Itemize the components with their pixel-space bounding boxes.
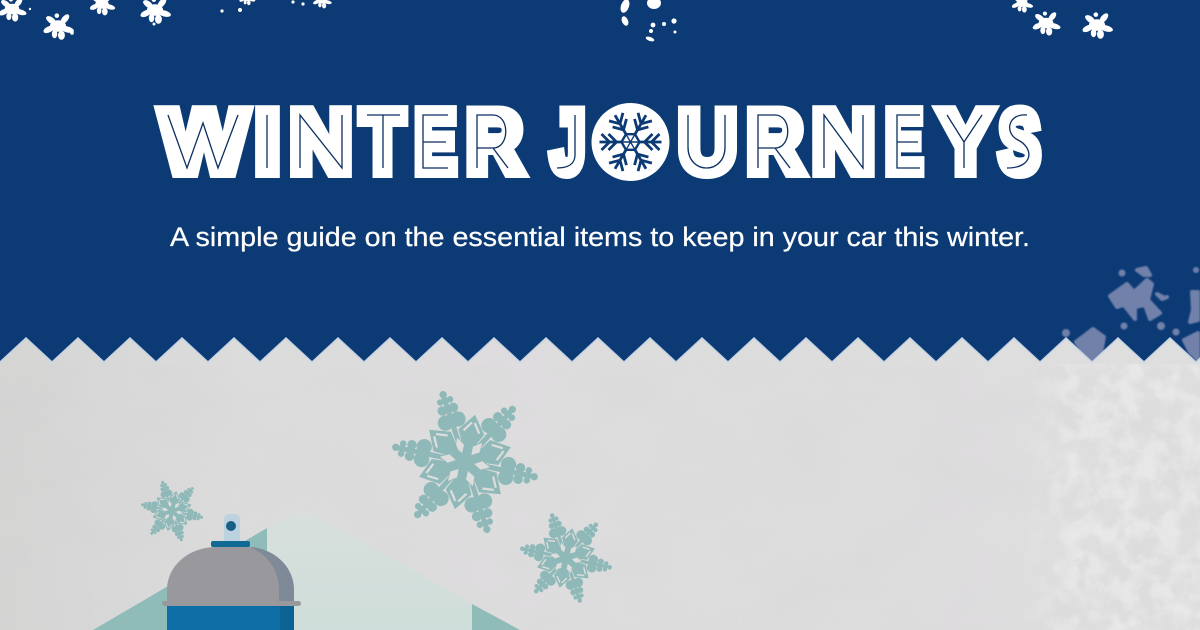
icon: navy snowflake in O <box>588 100 673 184</box>
can nozzle <box>224 514 240 544</box>
can rim <box>162 601 301 606</box>
title: WINTER JOURNEYS: N <box>290 94 352 191</box>
top snow splatters <box>0 0 1114 42</box>
mountain behind spray can <box>93 511 520 630</box>
title: WINTER JOURNEYS: R <box>467 92 522 191</box>
title: WINTER JOURNEYS: J <box>551 93 585 192</box>
title: WINTER JOURNEYS: Y <box>939 92 992 191</box>
title O: snowflake wheel <box>588 100 673 184</box>
title: WINTER JOURNEYS: I <box>255 92 280 191</box>
title: WINTER JOURNEYS: R <box>747 92 803 191</box>
can collar <box>211 541 250 547</box>
snowflake: large centre <box>364 366 566 558</box>
grey snow panel with zigzag edge <box>0 338 1200 630</box>
navy header background <box>0 0 1200 370</box>
title: WINTER JOURNEYS: S <box>999 93 1040 192</box>
title: WINTER JOURNEYS: N <box>812 93 875 191</box>
title: WINTER JOURNEYS: E <box>885 92 923 191</box>
can body shade <box>280 606 294 630</box>
can nozzle dot <box>226 521 236 531</box>
title: WINTER JOURNEYS <box>161 92 1040 192</box>
icon: spray can <box>162 514 301 630</box>
title: WINTER JOURNEYS: W <box>161 92 247 191</box>
snowflake: small right <box>502 497 630 619</box>
snowflake: small left <box>129 470 215 552</box>
can dome <box>167 547 294 606</box>
title: WINTER JOURNEYS: E <box>415 94 456 192</box>
title: WINTER JOURNEYS: O <box>603 92 657 191</box>
title: WINTER JOURNEYS: U <box>679 93 736 191</box>
title: WINTER JOURNEYS: T <box>361 93 404 191</box>
can body <box>167 606 294 630</box>
can dome shade <box>250 547 294 606</box>
subtitle: A simple guide on the essential items to keep in your car this winter. <box>170 222 1030 252</box>
title inline strokes <box>168 115 1029 168</box>
faded splatter, lower right of header <box>1064 268 1198 362</box>
